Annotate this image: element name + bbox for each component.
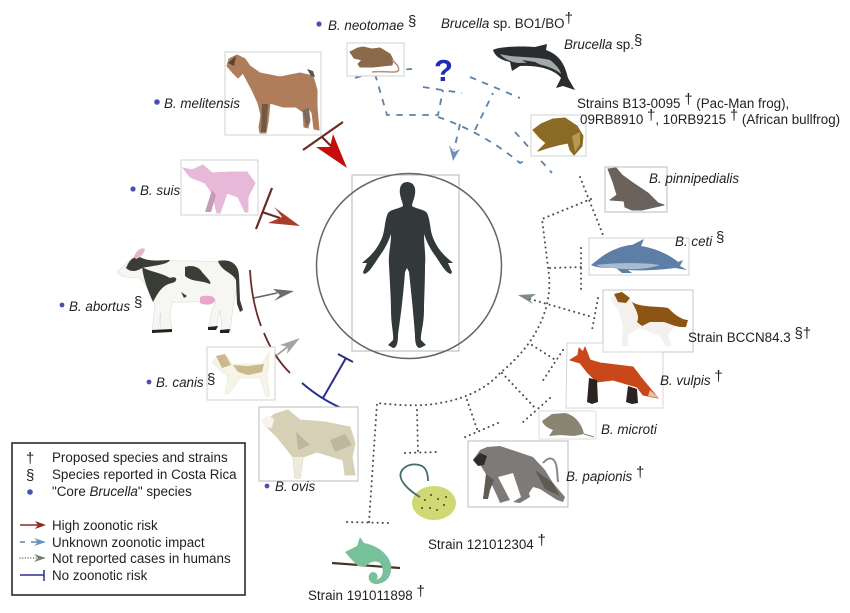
- animal: small dog: [207, 347, 275, 400]
- label: frog strains second line: , 10RB9215: [655, 112, 730, 127]
- label: frog strains second line: 09RB8910: [580, 112, 643, 127]
- legend: §: [26, 467, 34, 484]
- label: B. canis: [147, 371, 215, 390]
- label: B. neotomae: §: [408, 13, 416, 30]
- animal: frog: [531, 115, 586, 156]
- label: B. suis: B. suis: [140, 183, 180, 198]
- animal: fox: [566, 343, 663, 408]
- animal: goat: [225, 52, 321, 135]
- tree: not reported cases branches: [347, 177, 603, 523]
- label: B. canis: B. canis: [156, 375, 204, 390]
- animal: cow: [117, 248, 243, 333]
- legend key: high risk: [20, 521, 46, 529]
- label: B. abortus: [60, 294, 142, 314]
- label: frog strains second line: †: [647, 107, 655, 124]
- risk marker: B. ovis no risk: [302, 354, 353, 411]
- label: Strain BCCN84.3: §†: [794, 325, 811, 342]
- label: frog strains second line: †: [730, 107, 738, 124]
- label: B. papionis: B. papionis: [566, 469, 633, 484]
- risk marker: B. abortus: [250, 270, 294, 326]
- legend: High zoonotic risk: [52, 518, 158, 533]
- label: Brucella sp. BO1/BO: Brucella sp. BO1/BO: [441, 16, 565, 31]
- label: B. abortus: §: [134, 294, 142, 311]
- legend: Species reported in Costa Rica: [52, 467, 237, 482]
- legend key: not reported: [20, 554, 46, 562]
- arrow: unknown impact to human: [449, 145, 460, 161]
- label: B. melitensis: B. melitensis: [164, 96, 240, 111]
- animal: seal: [605, 167, 667, 212]
- label: B. microti: B. microti: [601, 422, 658, 437]
- animal: baboon: [468, 441, 568, 507]
- legend: No zoonotic risk: [52, 568, 148, 583]
- label: B. ceti: §: [716, 229, 724, 246]
- label: frog strains: Strains B13-0095: [577, 96, 680, 111]
- label: B. canis: §: [207, 371, 215, 388]
- animal: chameleon: [332, 537, 400, 584]
- label: frog strains: †: [684, 91, 693, 108]
- label: Brucella sp.: §: [634, 32, 642, 49]
- legend: Proposed species and strains: [52, 450, 228, 465]
- legend: Not reported cases in humans: [52, 551, 231, 566]
- icon: question mark: ?: [434, 53, 453, 88]
- arrow: not reported toward human: [518, 294, 536, 304]
- label: B. ovis: B. ovis: [275, 479, 315, 494]
- label: B. papionis: †: [636, 464, 644, 481]
- animal: stingray: [400, 464, 456, 520]
- animal: large dog: [603, 290, 693, 352]
- legend: †: [26, 450, 34, 467]
- animal: vole: [539, 411, 596, 439]
- legend key: unknown impact: [20, 538, 46, 546]
- label: B. vulpis: B. vulpis: [660, 373, 711, 388]
- label: frog strains second line: (African bullfrog): [738, 112, 840, 127]
- animal: mouse: [347, 43, 404, 76]
- risk marker: B. suis high risk: [256, 188, 300, 229]
- label: Strain 191011898: Strain 191011898: [308, 588, 413, 603]
- label: frog strains: (Pac-Man frog),: [693, 96, 789, 111]
- risk marker: B. canis: [264, 333, 300, 373]
- legend: [12, 443, 245, 595]
- label: Brucella sp.: Brucella sp.: [564, 37, 634, 52]
- label: B. ceti: B. ceti: [675, 234, 713, 249]
- legend: Unknown zoonotic impact: [52, 535, 205, 550]
- label: Brucella sp. BO1/BO: †: [565, 10, 573, 27]
- legend: "Core Brucella" species: [52, 484, 192, 499]
- label: B. vulpis: †: [714, 368, 723, 385]
- label: B. neotomae: B. neotomae: [328, 18, 404, 33]
- label: Strain 191011898: †: [416, 583, 425, 600]
- icon: human silhouette: [362, 182, 453, 348]
- animal: dolphin: [589, 238, 689, 275]
- risk marker: B. melitensis high risk: [303, 122, 347, 168]
- label: B. pinnipedialis: B. pinnipedialis: [649, 171, 739, 186]
- tree: unknown zoonotic impact branches: [355, 69, 552, 173]
- animal: whale: [493, 44, 575, 90]
- label: Strain 121012304: Strain 121012304: [428, 537, 534, 552]
- label: Strain BCCN84.3: Strain BCCN84.3: [688, 330, 791, 345]
- legend key: no risk: [20, 570, 44, 581]
- animal: sheep: [259, 407, 358, 481]
- label: Strain 121012304: †: [537, 532, 546, 549]
- label: B. abortus: B. abortus: [69, 299, 130, 314]
- label: B. neotomae: [316, 13, 416, 33]
- animal: pig: [181, 160, 258, 215]
- panel: human target: [316, 174, 502, 358]
